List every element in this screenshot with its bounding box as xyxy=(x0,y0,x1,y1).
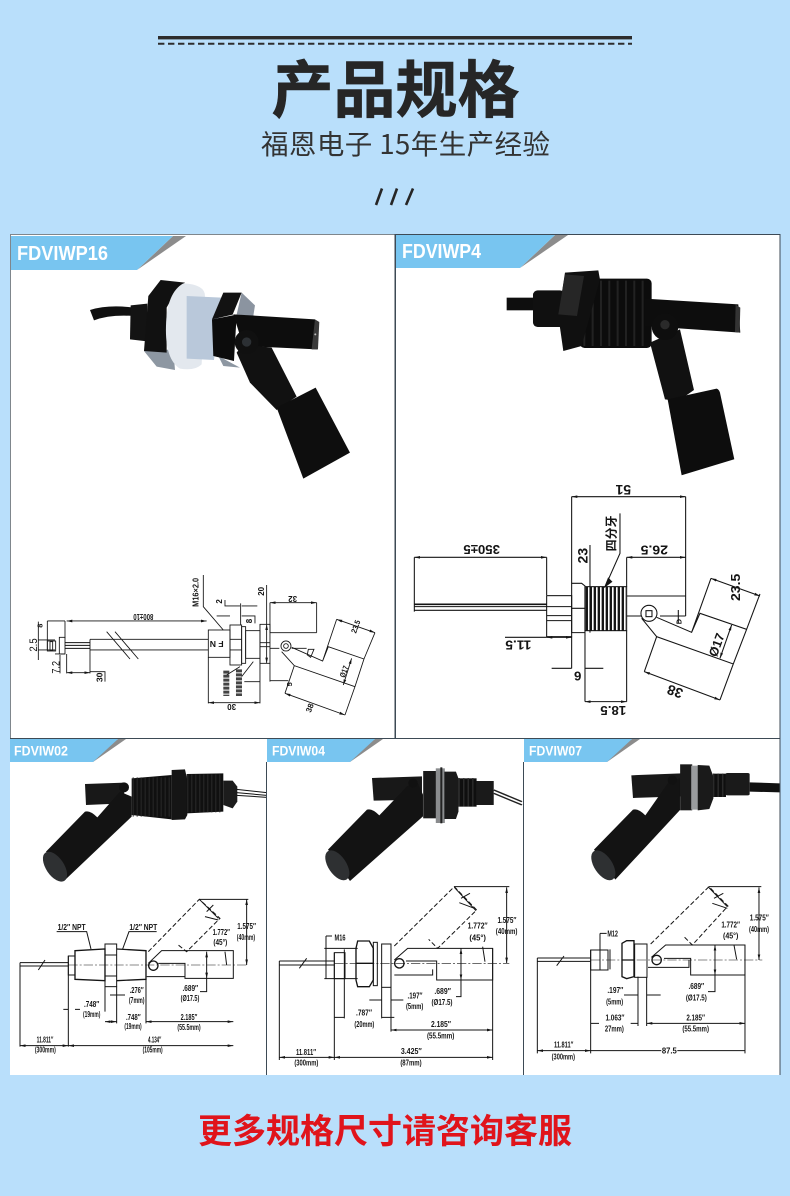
dimension drawing: FDVIW02: .689″ xyxy=(182,984,198,993)
dimension drawing: FDVIW07: (Ø17.5) xyxy=(686,992,707,1002)
panel separators xyxy=(10,234,780,1075)
dimension drawing: FDVIW07: 1.063″ xyxy=(605,1012,624,1022)
label: FDVIW07: FDVIW07 xyxy=(529,742,582,758)
dimension drawing: FDVIWP4: 38 xyxy=(665,681,685,702)
dimension drawing: FDVIW02: 2.185″ xyxy=(181,1013,197,1022)
dimension drawing: FDVIW07: 1.772″ xyxy=(721,919,740,929)
dimension drawing: FDVIW04: (20mm) xyxy=(354,1019,374,1029)
dimension drawing: FDVIWP4: 350±5 xyxy=(463,542,500,557)
dimension drawing: FDVIW02: (55.5mm) xyxy=(177,1023,201,1032)
decorative slashes icon xyxy=(376,188,413,205)
dimension drawing: FDVIW02: (19mm) xyxy=(83,1010,101,1019)
dimension drawing: FDVIWP16: 5 xyxy=(285,682,294,686)
dimension drawing: FDVIWP16: 32 xyxy=(288,594,297,603)
dimension drawing: FDVIWP16: 30 xyxy=(94,672,104,682)
dimension drawing: FDVIW04: (40mm) xyxy=(496,926,518,936)
dimension drawing: FDVIW07: 11.811″ xyxy=(554,1040,573,1050)
dimension drawing: FDVIW07 xyxy=(537,887,769,1062)
dimension drawing: FDVIWP4: 四分牙 xyxy=(605,515,619,551)
dimension drawing: FDVIW04: .197″ xyxy=(407,991,422,1001)
dimension drawing: FDVIW04: (87mm) xyxy=(400,1057,422,1067)
dimension drawing: FDVIWP4: 51 xyxy=(615,482,631,498)
dimension drawing: FDVIW04: 1.575″ xyxy=(497,915,516,925)
label: FDVIWP16: FDVIWP16 xyxy=(17,243,108,265)
panel: FDVIWP4 xyxy=(396,234,780,738)
dimension drawing: FDVIWP16: 2 xyxy=(215,599,224,604)
title: 产品规格 xyxy=(271,40,520,130)
label: FDVIW02 xyxy=(10,739,126,762)
label: FDVIW02: FDVIW02 xyxy=(14,742,68,758)
dimension drawing: FDVIW07: 1.575″ xyxy=(750,913,769,923)
dimension drawing: FDVIW02 xyxy=(20,899,256,1054)
subtitle: 福恩电子 15年生产经验 xyxy=(261,122,550,162)
dimension drawing: FDVIWP16: F N xyxy=(210,639,224,649)
dimension drawing: FDVIW02: (7mm) xyxy=(129,996,145,1005)
dimension drawing: FDVIW07: 2.185″ xyxy=(686,1012,705,1022)
panel: FDVIW07 xyxy=(524,739,780,1075)
dimension drawing: FDVIWP16: 800±10 xyxy=(133,612,153,621)
panel: FDVIWP16 xyxy=(10,234,395,738)
dimension drawing: FDVIW04: 3.425″ xyxy=(401,1046,422,1056)
dimension drawing: FDVIW07: 87.5 xyxy=(662,1046,677,1056)
dimension drawing: FDVIW04: 11.811″ xyxy=(296,1047,316,1057)
dimension drawing: FDVIW04: .787″ xyxy=(356,1008,372,1018)
product photo: FDVIWP16 xyxy=(90,280,350,479)
panel: FDVIW02 xyxy=(10,739,267,1075)
dimension drawing: FDVIW04: M16 xyxy=(334,932,346,942)
dimension drawing: FDVIWP16: 8 xyxy=(35,624,44,628)
dimension drawing: FDVIW07: 27mm) xyxy=(605,1024,624,1034)
dimension drawing: FDVIWP16: 2.5 xyxy=(28,638,40,652)
dimension drawing: FDVIW02: 11.811″ xyxy=(37,1035,53,1044)
label: FDVIW07 xyxy=(524,739,640,762)
dimension drawing: FDVIW02: (Ø17.5) xyxy=(181,994,200,1003)
dimension drawing: FDVIW02: 4.134″ xyxy=(148,1035,161,1044)
dimension drawing: FDVIW07: (300mm) xyxy=(552,1052,575,1062)
dimension drawing: FDVIW07: .197″ xyxy=(607,985,623,995)
footer note: 更多规格尺寸请咨询客服 xyxy=(198,1104,572,1153)
dimension drawing: FDVIWP16: 23.5 xyxy=(349,618,363,634)
label: FDVIWP16 xyxy=(11,236,186,270)
dimension drawing: FDVIW04: (45°) xyxy=(469,932,486,942)
dimension drawing: FDVIW02: (105mm) xyxy=(143,1045,163,1054)
dimension drawing: FDVIW02: 1/2″ NPT xyxy=(58,923,86,932)
product photo: FDVIW07 xyxy=(586,764,780,884)
dimension drawing: FDVIW04: (55.5mm) xyxy=(427,1030,454,1040)
dimension drawing: FDVIW02: (300mm) xyxy=(35,1045,56,1054)
dimension drawing: FDVIW04: .689″ xyxy=(434,986,451,996)
dimension drawing: FDVIW02: .748″ xyxy=(126,1013,141,1022)
dimension drawing: FDVIWP16: 30 xyxy=(227,702,236,711)
dimension drawing: FDVIW07: (45°) xyxy=(723,930,739,940)
label: FDVIWP4 xyxy=(396,235,568,268)
dimension drawing: FDVIWP4: 11.5 xyxy=(505,637,531,652)
dimension drawing: FDVIW02: (45°) xyxy=(213,938,228,947)
label: FDVIW04: FDVIW04 xyxy=(272,742,325,758)
dimension drawing: FDVIW04: (300mm) xyxy=(294,1058,318,1068)
dimension drawing: FDVIWP4: D xyxy=(674,619,683,624)
dimension drawing: FDVIWP16: 8 xyxy=(245,618,254,623)
dimension drawing: FDVIWP4: 26.5 xyxy=(640,542,668,557)
header rules xyxy=(158,36,632,44)
dimension drawing: FDVIWP4: Ø17 xyxy=(706,631,728,659)
dimension drawing: FDVIW07: M12 xyxy=(607,928,618,938)
panel: FDVIW04 xyxy=(267,739,524,1075)
dimension drawing: FDVIW07: (55.5mm) xyxy=(682,1024,709,1034)
dimension drawing: FDVIWP4: 23 xyxy=(575,548,591,563)
dimension drawing: FDVIW02: 1.772″ xyxy=(213,928,230,937)
dimension drawing: FDVIW02: (40mm) xyxy=(237,933,255,942)
dimension drawing: FDVIWP4: 6 xyxy=(574,668,581,683)
dimension drawing: FDVIWP16: 38 xyxy=(304,702,316,714)
dimension drawing: FDVIW02: .748″ xyxy=(84,1000,99,1009)
dimension drawing: FDVIWP16: 20 xyxy=(257,586,266,596)
dimension drawing: FDVIW04: (Ø17.5) xyxy=(431,997,453,1007)
product photo: FDVIW02 xyxy=(38,769,267,886)
dimension drawing: FDVIW04: 2.185″ xyxy=(431,1019,451,1029)
dimension drawing: FDVIW07: .689″ xyxy=(688,981,704,991)
dimension drawing: FDVIWP4 xyxy=(414,482,760,718)
dimension drawing: FDVIW02: 1/2″ NPT xyxy=(129,923,157,932)
label: FDVIW04 xyxy=(267,739,383,762)
dimension drawing: FDVIW04: (5mm) xyxy=(406,1001,423,1011)
label: FDVIWP4: FDVIWP4 xyxy=(402,241,482,263)
dimension drawing: FDVIWP16 xyxy=(28,575,375,715)
product photo: FDVIW04 xyxy=(320,767,522,884)
dimension drawing: FDVIW07: (40mm) xyxy=(749,924,769,934)
dimension drawing: FDVIW02: .276″ xyxy=(130,986,144,995)
dimension drawing: FDVIW04: 1.772″ xyxy=(468,921,488,931)
product photo: FDVIWP4 xyxy=(507,270,740,475)
dimension drawing: FDVIW07: (5mm) xyxy=(606,996,623,1006)
dimension drawing: FDVIW02: 1.575″ xyxy=(237,922,256,931)
dimension drawing: FDVIW04 xyxy=(279,887,518,1068)
dimension drawing: FDVIWP16: 7.2 xyxy=(51,661,63,674)
dimension drawing: FDVIW02: (19mm) xyxy=(124,1022,142,1031)
dimension drawing: FDVIWP4: 23.5 xyxy=(728,573,743,601)
dimension drawing: FDVIWP16: Ø17 xyxy=(338,664,351,679)
dimension drawing: FDVIWP4: 18.5 xyxy=(600,703,626,718)
dimension drawing: FDVIWP16: M16×2.0 xyxy=(191,577,200,607)
